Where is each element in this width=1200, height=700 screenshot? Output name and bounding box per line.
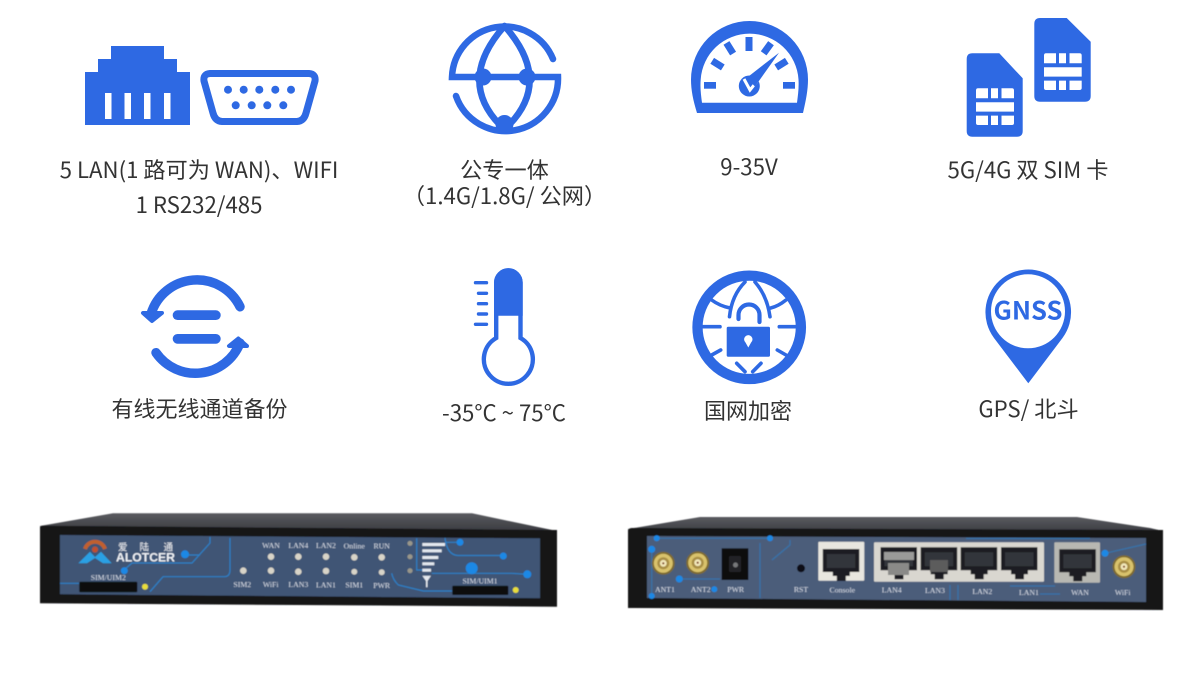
port labels: PWR: [727, 585, 745, 594]
indicator LEDs and labels: LAN2: [316, 541, 336, 550]
SIM slot 2: SIM/UIM2: [91, 573, 126, 582]
icon: voltage gauge: [691, 21, 808, 113]
router front body: [40, 526, 557, 607]
label: antenna: （1.4G/1.8G/ 公网）: [403, 179, 606, 211]
port labels: [655, 585, 1131, 597]
front faceplate: [60, 535, 540, 598]
label: backup: 有线无线通道备份: [111, 392, 288, 424]
port labels: LAN3: [925, 586, 945, 595]
icon: DB9 serial port: [204, 74, 315, 122]
indicator LEDs and labels: LAN1: [316, 580, 336, 590]
console port: [818, 542, 864, 581]
brand logo: 爱: [118, 540, 127, 554]
icon: dual SIM cards: [967, 18, 1091, 137]
port labels: LAN4: [882, 586, 902, 594]
port labels: LAN1: [1019, 588, 1039, 597]
signal strength bars: [422, 543, 445, 587]
LAN port block: [874, 542, 1044, 582]
icon: GNSS map pin: GNSS: [994, 292, 1062, 328]
indicator LEDs and labels: RUN: [373, 542, 390, 550]
SIM slot 2: [79, 573, 148, 592]
indicator LEDs and labels: LAN4: [288, 541, 308, 550]
icon: thermometer: [476, 268, 533, 384]
port labels: WAN: [1071, 588, 1089, 597]
label: GPS: GPS/ 北斗: [978, 392, 1079, 424]
indicator LEDs and labels: WAN: [262, 541, 280, 550]
indicator LEDs and labels: [233, 541, 413, 590]
label: encryption: 国网加密: [704, 394, 792, 426]
port labels: LAN2: [972, 587, 992, 596]
port labels: WiFi: [1115, 588, 1131, 597]
brand logo: ALOTCER: [116, 553, 176, 565]
label: ports: 5 LAN(1 路可为 WAN)、WIFI: [60, 153, 338, 185]
photo: router rear panel: [628, 517, 1163, 610]
rear body: [628, 528, 1163, 610]
brand logo: 陆: [140, 540, 150, 554]
SIM slot 1: [452, 576, 519, 595]
label: ports: [60, 153, 338, 220]
icon: RJ45 and serial ports: [85, 46, 315, 125]
rear top surface: [628, 517, 1163, 540]
label: antenna: 公专一体: [460, 153, 549, 185]
antenna connectors: [652, 551, 1136, 578]
router top surface: [40, 513, 557, 540]
icon: RJ45 port: [85, 46, 190, 125]
brand logo: 通: [164, 540, 174, 554]
port labels: Console: [830, 586, 856, 594]
reset hole: [797, 564, 805, 572]
indicator LEDs and labels: PWR: [373, 581, 391, 590]
icon: globe: [452, 26, 558, 133]
brand logo: [78, 540, 176, 565]
indicator LEDs and labels: WiFi: [263, 580, 279, 589]
WAN port: [1054, 542, 1100, 583]
indicator LEDs and labels: SIM2: [233, 580, 251, 589]
label: antenna: [403, 153, 606, 211]
port labels: RST: [794, 585, 808, 594]
indicator LEDs and labels: SIM1: [345, 580, 363, 590]
rear faceplate: [647, 535, 1146, 602]
icon: wired wireless backup sync: [143, 280, 247, 373]
port labels: ANT2: [691, 585, 711, 594]
icon: national grid encryption globe: [698, 276, 801, 379]
photo: router front panel: [40, 513, 557, 607]
SIM slot 1: SIM/UIM1: [462, 576, 498, 586]
icon: GNSS map pin: [985, 270, 1071, 383]
power jack: [722, 548, 748, 580]
port labels: ANT1: [655, 585, 675, 594]
label: ports: 1 RS232/485: [136, 188, 262, 220]
label: SIM: 5G/4G 双 SIM 卡: [948, 153, 1108, 185]
indicator LEDs and labels: LAN3: [288, 580, 308, 589]
indicator LEDs and labels: Online: [344, 542, 365, 550]
label: voltage: 9-35V: [720, 150, 778, 182]
label: temperature: -35°C ~ 75°C: [442, 396, 566, 428]
